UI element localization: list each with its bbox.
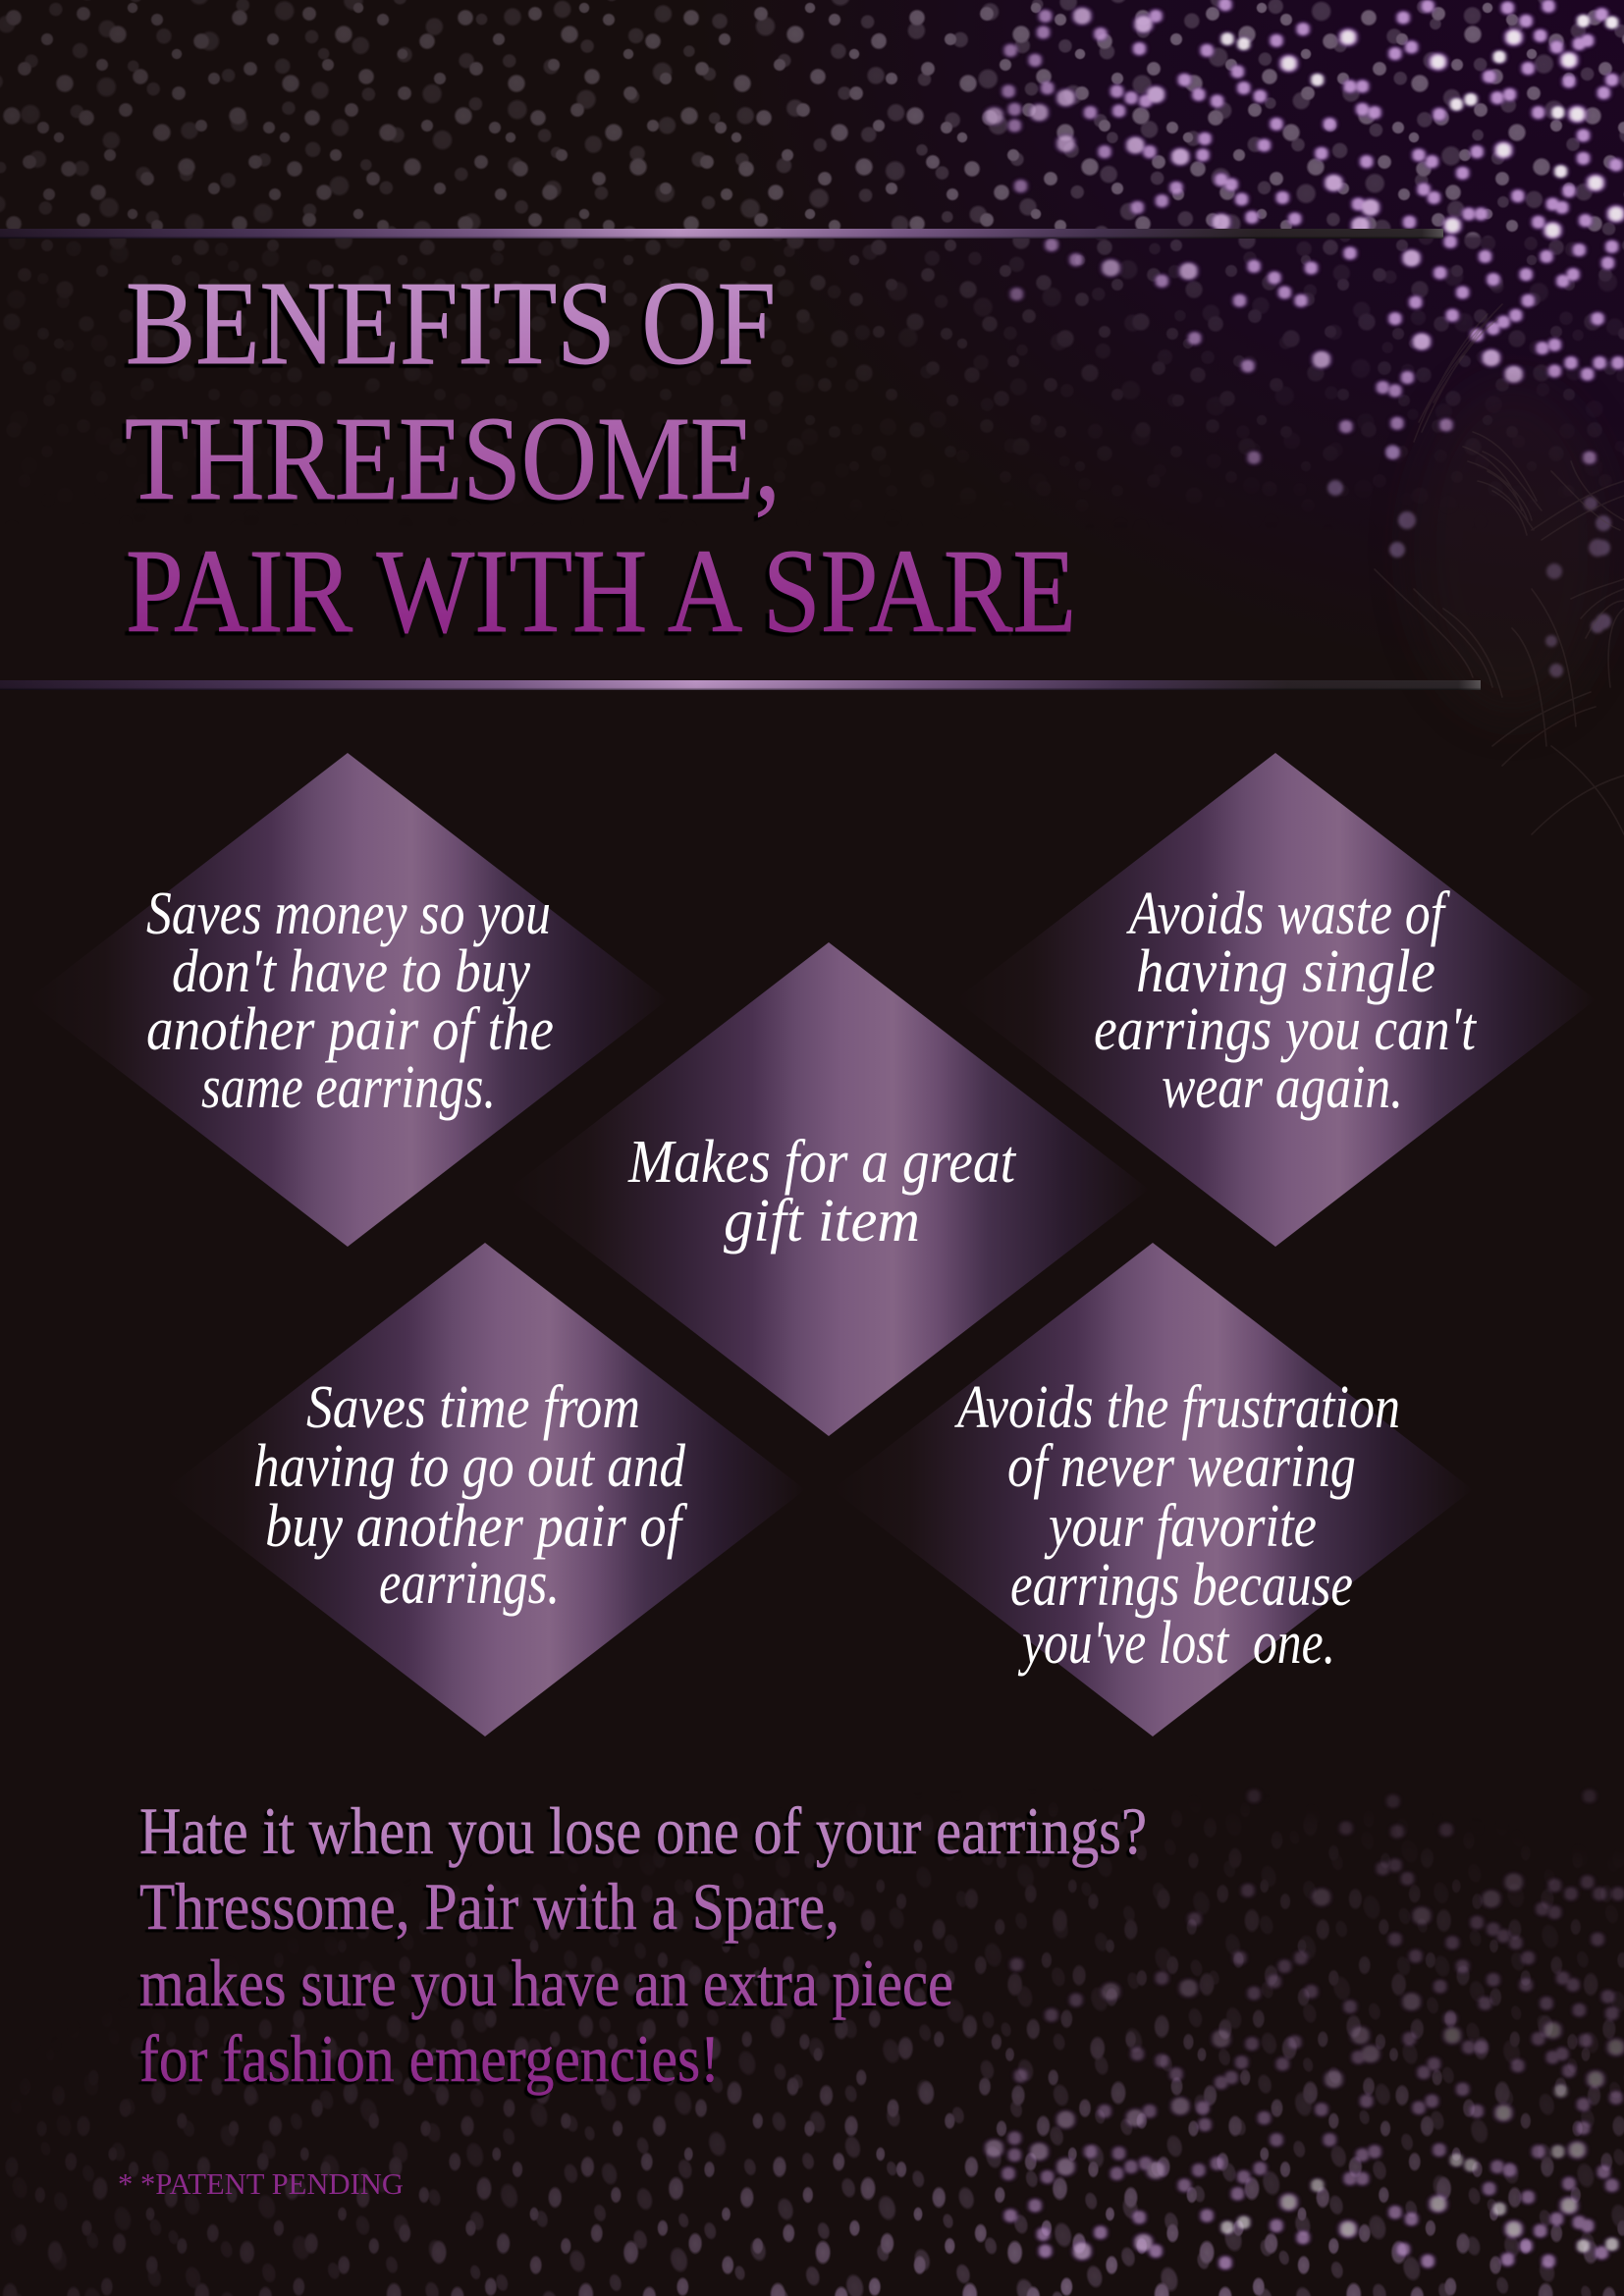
- text: great gift: [627, 1129, 1017, 1255]
- text: avoids frustration: earrings because: [1010, 1552, 1353, 1619]
- closing message: makes sure you have an extra piece: [139, 1946, 953, 2020]
- title: Benefits of Threesome, Pair with a Spare: [125, 257, 1076, 658]
- footnote: patent pending: * *PATENT PENDING: [118, 2166, 404, 2201]
- text: saves time: Saves time from: [306, 1374, 640, 1441]
- text: saves money: same earrings.: [201, 1054, 496, 1121]
- text: great gift: gift item: [724, 1188, 920, 1255]
- text: avoids frustration: [954, 1374, 1400, 1677]
- text: great gift: Makes for a great: [627, 1129, 1017, 1196]
- top divider bar: [0, 229, 1443, 239]
- text: saves time: [253, 1374, 688, 1617]
- text: avoids waste: [1094, 881, 1478, 1121]
- text: avoids waste: wear again.: [1162, 1054, 1403, 1121]
- text: avoids waste: Avoids waste of: [1126, 881, 1450, 947]
- text: avoids frustration: Avoids the frustration: [954, 1374, 1400, 1441]
- title: Benefits of Threesome, Pair with a Spare: PAIR WITH A SPARE: [126, 525, 1076, 658]
- panel: avoids frustration diamond: [833, 1243, 1473, 1736]
- text: saves money: don't have to buy: [172, 938, 530, 1005]
- panel: saves money diamond: [27, 753, 668, 1247]
- text: avoids frustration: your favorite: [1044, 1493, 1317, 1560]
- text: saves money: [146, 881, 554, 1121]
- panel: avoids waste diamond: [955, 753, 1596, 1247]
- title: Benefits of Threesome, Pair with a Spare: THREESOME,: [125, 393, 781, 525]
- text: saves time: buy another pair of: [265, 1493, 688, 1560]
- text: saves time: earrings.: [379, 1550, 560, 1617]
- closing message: [139, 1793, 1147, 2096]
- text: avoids frustration: you've lost one.: [1017, 1610, 1335, 1677]
- closing message: Hate it when you lose one of your earrings?: [139, 1793, 1147, 1868]
- text: saves money: Saves money so you: [146, 881, 551, 947]
- panel: saves time diamond: [165, 1243, 805, 1736]
- panel: great gift diamond: [509, 942, 1149, 1436]
- text: saves time: having to go out and: [253, 1433, 686, 1500]
- bottom divider bar: [0, 680, 1481, 690]
- text: saves money: another pair of the: [146, 996, 554, 1063]
- closing message: Thressome, Pair with a Spare,: [139, 1869, 839, 1944]
- text: avoids frustration: of never wearing: [1007, 1433, 1356, 1500]
- text: avoids waste: earrings you can't: [1094, 996, 1478, 1063]
- text: avoids waste: having single: [1136, 938, 1435, 1005]
- title: Benefits of Threesome, Pair with a Spare: BENEFITS OF: [126, 257, 776, 390]
- closing message: for fashion emergencies!: [139, 2021, 720, 2096]
